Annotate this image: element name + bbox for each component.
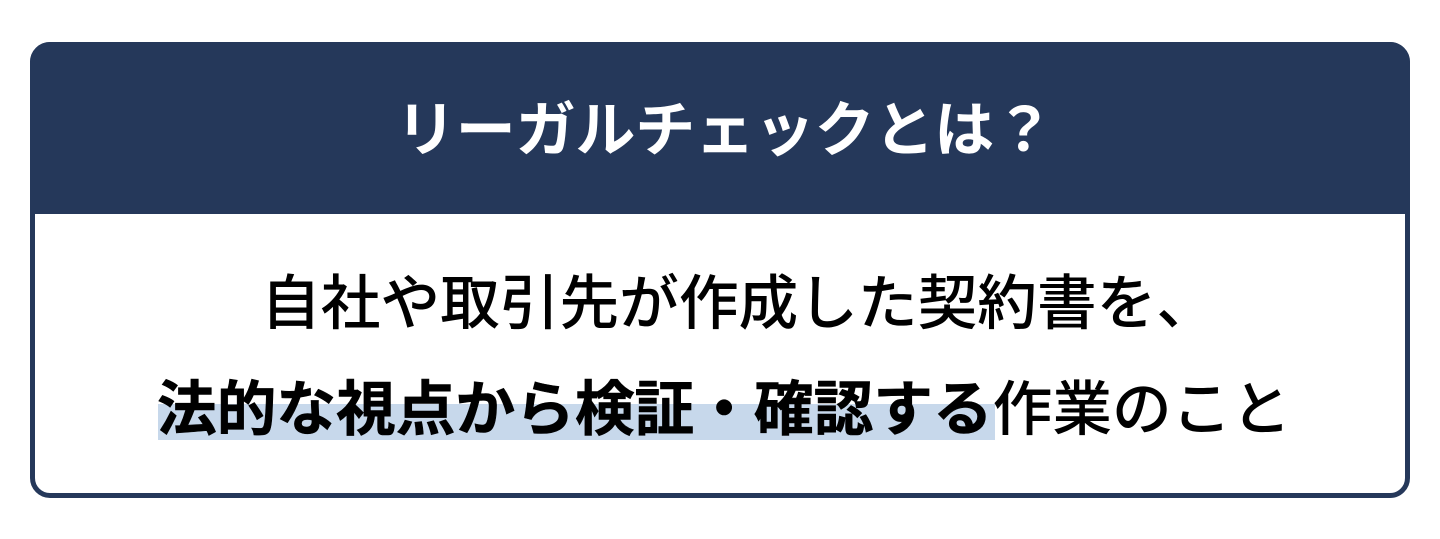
heading band (30, 42, 1410, 214)
text block: first line: 自社や取引先が作成した契約書を、 (261, 270, 1216, 337)
title: リーガルチェックとは？ (396, 97, 1054, 164)
highlight marker (158, 404, 995, 440)
text block: second line: 法的な視点から検証・確認する作業のこと (157, 376, 1291, 443)
